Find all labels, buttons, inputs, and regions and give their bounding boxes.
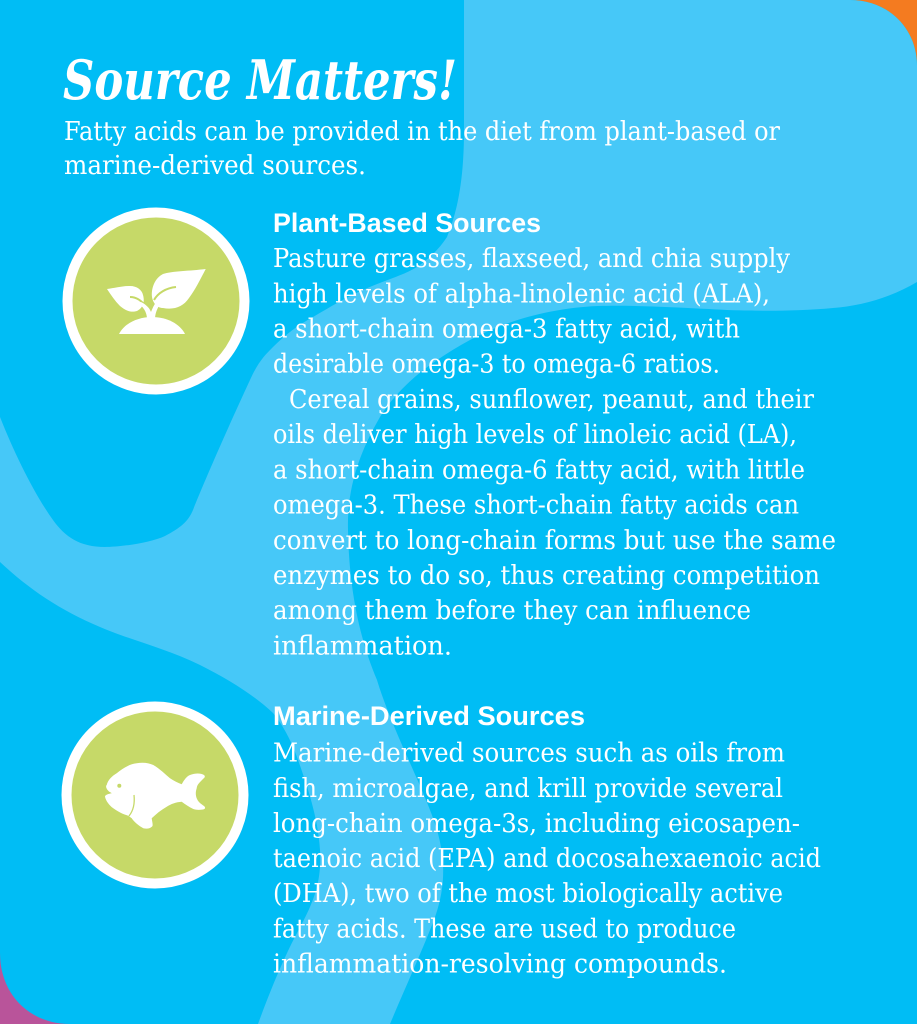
title: Source Matters! (63, 48, 457, 112)
marine-derived body text: long-chain omega-3s, including eicosapen- (273, 809, 800, 839)
plant-based body text: high levels of alpha-linolenic acid (ALA), (273, 279, 770, 309)
plant-based body text: among them before they can influence (273, 596, 751, 626)
plant-based body text: Pasture grasses, flaxseed, and chia supply (273, 244, 790, 274)
plant-based body text: a short-chain omega-3 fatty acid, with (273, 314, 740, 344)
plant-based body text: a short-chain omega-6 fatty acid, with little (273, 455, 805, 485)
marine-derived body text: fish, microalgae, and krill provide several (273, 774, 783, 804)
plant-based body text: omega-3. These short-chain fatty acids can (273, 491, 799, 521)
marine-derived body text: inflammation-resolving compounds. (273, 950, 727, 980)
intro text: marine-derived sources. (64, 151, 366, 181)
marine-derived body text (273, 739, 821, 980)
marine-derived body text: Marine-derived sources such as oils from (273, 739, 785, 769)
plant-based body text: Cereal grains, sunflower, peanut, and their (289, 385, 815, 415)
plant-based body text (273, 244, 836, 661)
plant-based body text: desirable omega-3 to omega-6 ratios. (273, 350, 720, 380)
marine-derived heading: Marine-Derived Sources (273, 701, 585, 731)
plant-based body text: enzymes to do so, thus creating competition (273, 561, 820, 591)
corner: orange top right (800, 0, 917, 90)
icon: fish (66, 706, 244, 884)
intro text (64, 117, 781, 181)
corner: magenta bottom left (0, 930, 90, 1024)
icon: plant seedling (68, 212, 244, 390)
plant-based body text: convert to long-chain forms but use the same (273, 526, 836, 556)
plant-based body text: inflammation. (273, 631, 452, 661)
marine-derived body text: (DHA), two of the most biologically active (273, 879, 783, 909)
plant-based body text: oils deliver high levels of linoleic acid (LA), (273, 420, 797, 450)
marine-derived body text: taenoic acid (EPA) and docosahexaenoic acid (273, 844, 821, 874)
plant-based heading: Plant-Based Sources (273, 208, 541, 238)
marine-derived body text: fatty acids. These are used to produce (273, 914, 736, 944)
intro text: Fatty acids can be provided in the diet from plant-based or (64, 117, 781, 147)
